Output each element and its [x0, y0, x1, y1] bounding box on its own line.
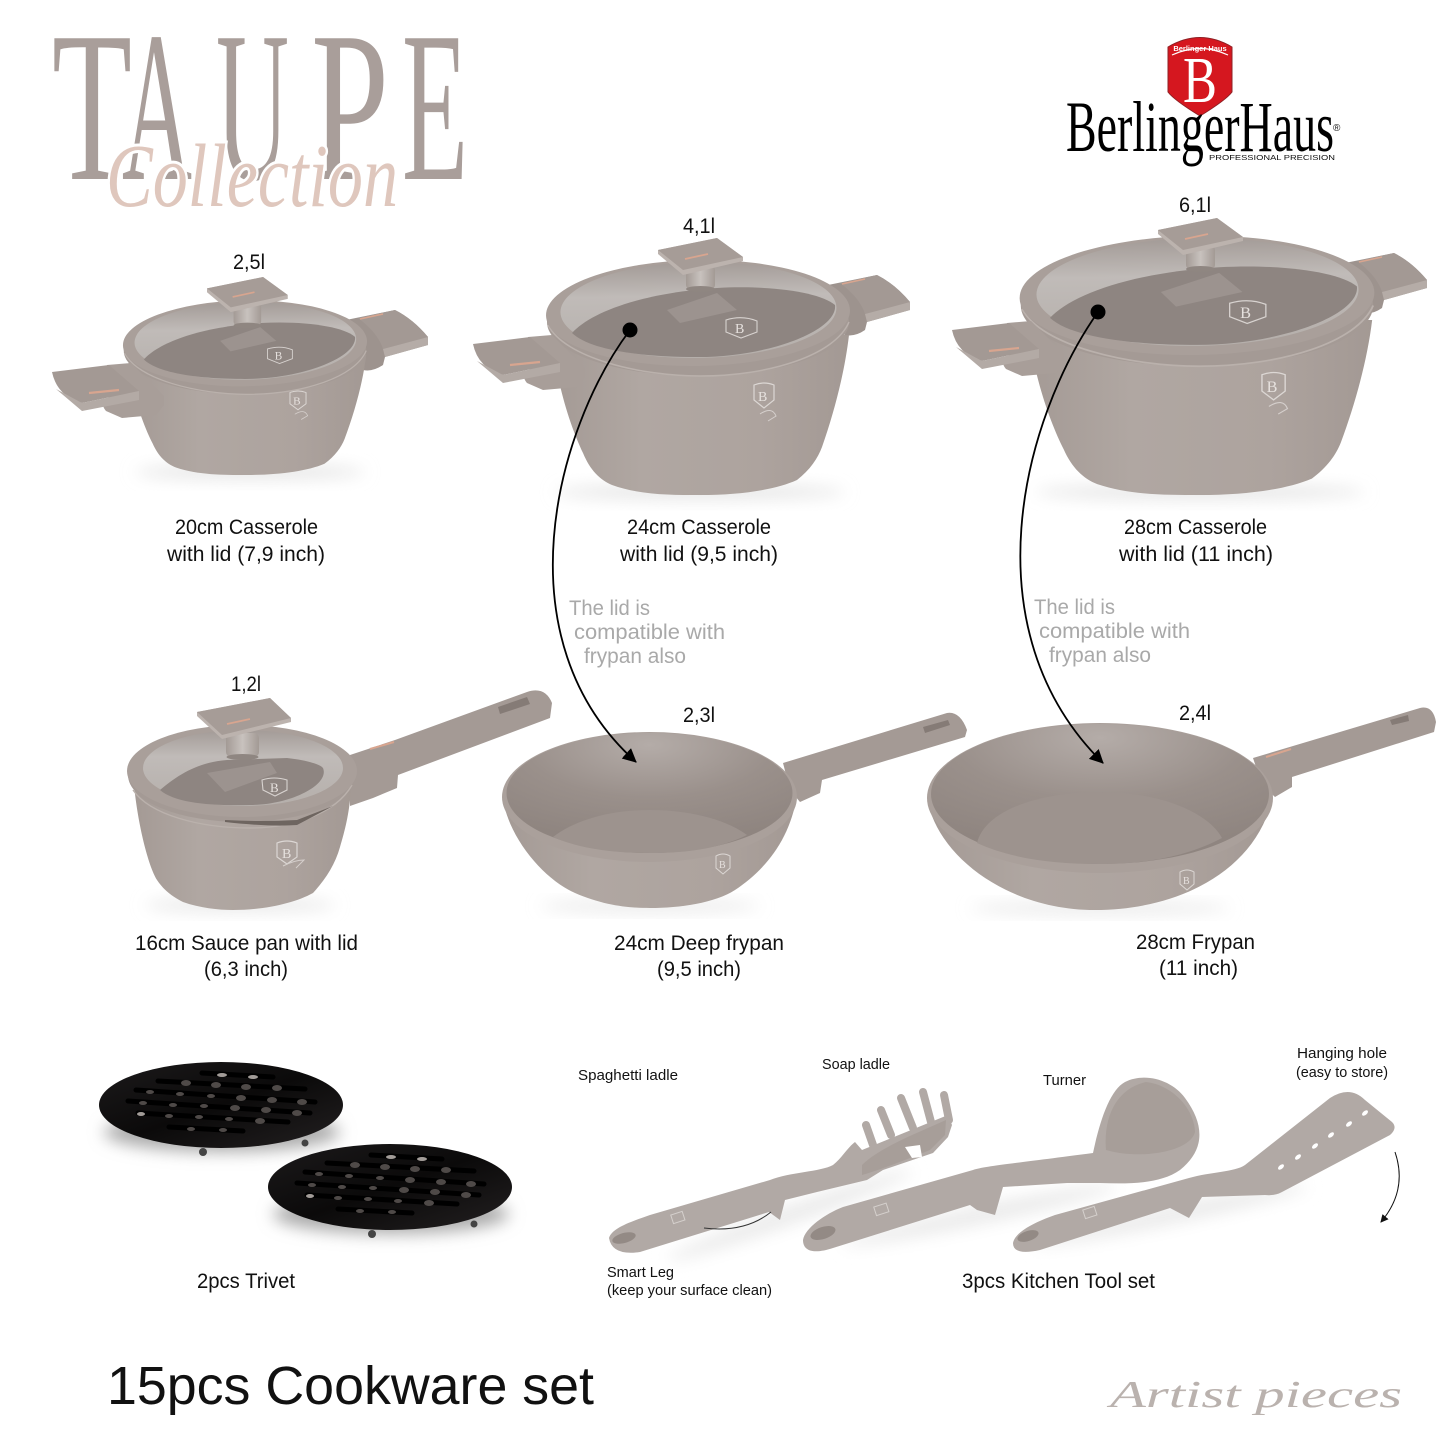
capacity 2,3l: 2,3l [683, 704, 715, 727]
badge [716, 854, 730, 874]
label: hanging hole: (easy to store) [1296, 1064, 1388, 1081]
label: smart leg: (keep your surface clean) [607, 1282, 772, 1299]
arrow: 24cm lid to deep frypan [553, 322, 638, 762]
label: smart leg [607, 1264, 772, 1299]
label: smart leg: Smart Leg [607, 1264, 674, 1281]
utensil: turner [1013, 1092, 1395, 1253]
product: 16cm sauce pan [127, 690, 552, 911]
badge: B [719, 860, 726, 871]
label: soap ladle: Soap ladle [822, 1056, 890, 1073]
product: 24cm casserole [473, 238, 910, 499]
label: 16cm sauce pan: 16cm Sauce pan with lid [135, 932, 358, 955]
label: spaghetti ladle: Spaghetti ladle [578, 1067, 678, 1084]
badge on lid: B [270, 780, 279, 795]
note: lid compatible (28cm) [1034, 596, 1190, 667]
note: lid compatible (28cm): compatible with [1039, 620, 1190, 643]
badge [1180, 870, 1194, 890]
label: 20cm casserole [166, 516, 325, 566]
label: 28cm casserole: 28cm Casserole [1124, 516, 1267, 539]
label: 16cm sauce pan [135, 932, 358, 981]
note: lid compatible (24cm) [569, 597, 725, 668]
label: 28cm casserole: with lid (11 inch) [1118, 543, 1273, 566]
note: lid compatible (24cm): compatible with [574, 621, 725, 644]
badge on body [277, 841, 304, 868]
note: lid compatible (24cm): The lid is [569, 597, 650, 620]
note: lid compatible (28cm): The lid is [1034, 596, 1115, 619]
arrow: hanging hole [1381, 1152, 1399, 1222]
icon: red shield: Berlinger Haus [1173, 44, 1227, 53]
capacity 2,5l: 2,5l [233, 251, 265, 274]
label: 28cm frypan [1136, 931, 1255, 980]
product: 28cm frypan [927, 708, 1436, 913]
label: kitchen tool set: 3pcs Kitchen Tool set [962, 1270, 1155, 1293]
note: lid compatible (28cm): frypan also [1049, 644, 1151, 667]
logo: Berlinger Haus: ® [1333, 123, 1341, 134]
badge on body: B [282, 847, 291, 862]
label: 20cm casserole: 20cm Casserole [175, 516, 318, 539]
product: 24cm deep frypan [502, 713, 967, 911]
label: hanging hole: Hanging hole [1297, 1045, 1387, 1062]
signature: artist pieces: Artist pieces [1105, 1374, 1402, 1416]
label: turner: Turner [1043, 1072, 1086, 1089]
icon: red shield [1168, 38, 1232, 117]
heading: 15pcs cookware set: 15pcs Cookware set [107, 1356, 594, 1416]
label: 28cm frypan: (11 inch) [1159, 957, 1238, 980]
badge on lid [262, 778, 287, 796]
capacity 1,2l: 1,2l [231, 673, 261, 696]
frypan handle [783, 713, 967, 802]
trivet 2 [268, 1144, 512, 1238]
label: 28cm frypan: 28cm Frypan [1136, 931, 1255, 954]
capacity 2,4l: 2,4l [1179, 702, 1211, 725]
logo: Berlinger Haus [1066, 38, 1341, 167]
product: 28cm casserole [952, 218, 1427, 499]
pan handle [350, 690, 552, 806]
title: Taupe Collection: Collection [106, 127, 398, 226]
logo: Berlinger Haus: PROFESSIONAL PRECISION [1209, 153, 1335, 162]
label: 24cm casserole: with lid (9,5 inch) [619, 543, 778, 566]
label: 24cm casserole: 24cm Casserole [627, 516, 771, 539]
product: 20cm casserole [52, 277, 428, 479]
capacity 6,1l: 6,1l [1179, 194, 1211, 217]
trivet 1 [99, 1062, 343, 1156]
label: 24cm deep frypan: 24cm Deep frypan [614, 932, 784, 955]
utensil: soup ladle [803, 1078, 1199, 1253]
utensil: spaghetti ladle [609, 1092, 952, 1268]
capacity 4,1l: 4,1l [683, 215, 715, 238]
badge: B [1183, 876, 1190, 887]
frypan handle [1253, 708, 1436, 797]
label: 24cm deep frypan [614, 932, 784, 981]
label: 20cm casserole: with lid (7,9 inch) [166, 543, 325, 566]
arrow: 28cm lid to frypan [1020, 304, 1106, 763]
knob [197, 698, 291, 760]
label: 28cm casserole [1118, 516, 1273, 566]
label: 24cm deep frypan: (9,5 inch) [657, 958, 741, 981]
note: lid compatible (24cm): frypan also [584, 645, 686, 668]
title: Taupe Collection [52, 0, 468, 226]
label: trivet: 2pcs Trivet [197, 1270, 295, 1293]
icon: red shield: B [1183, 44, 1217, 117]
label: 16cm sauce pan: (6,3 inch) [204, 958, 288, 981]
label: 24cm casserole [619, 516, 778, 566]
smart leg pointer [704, 1212, 771, 1229]
label: hanging hole [1296, 1045, 1388, 1081]
